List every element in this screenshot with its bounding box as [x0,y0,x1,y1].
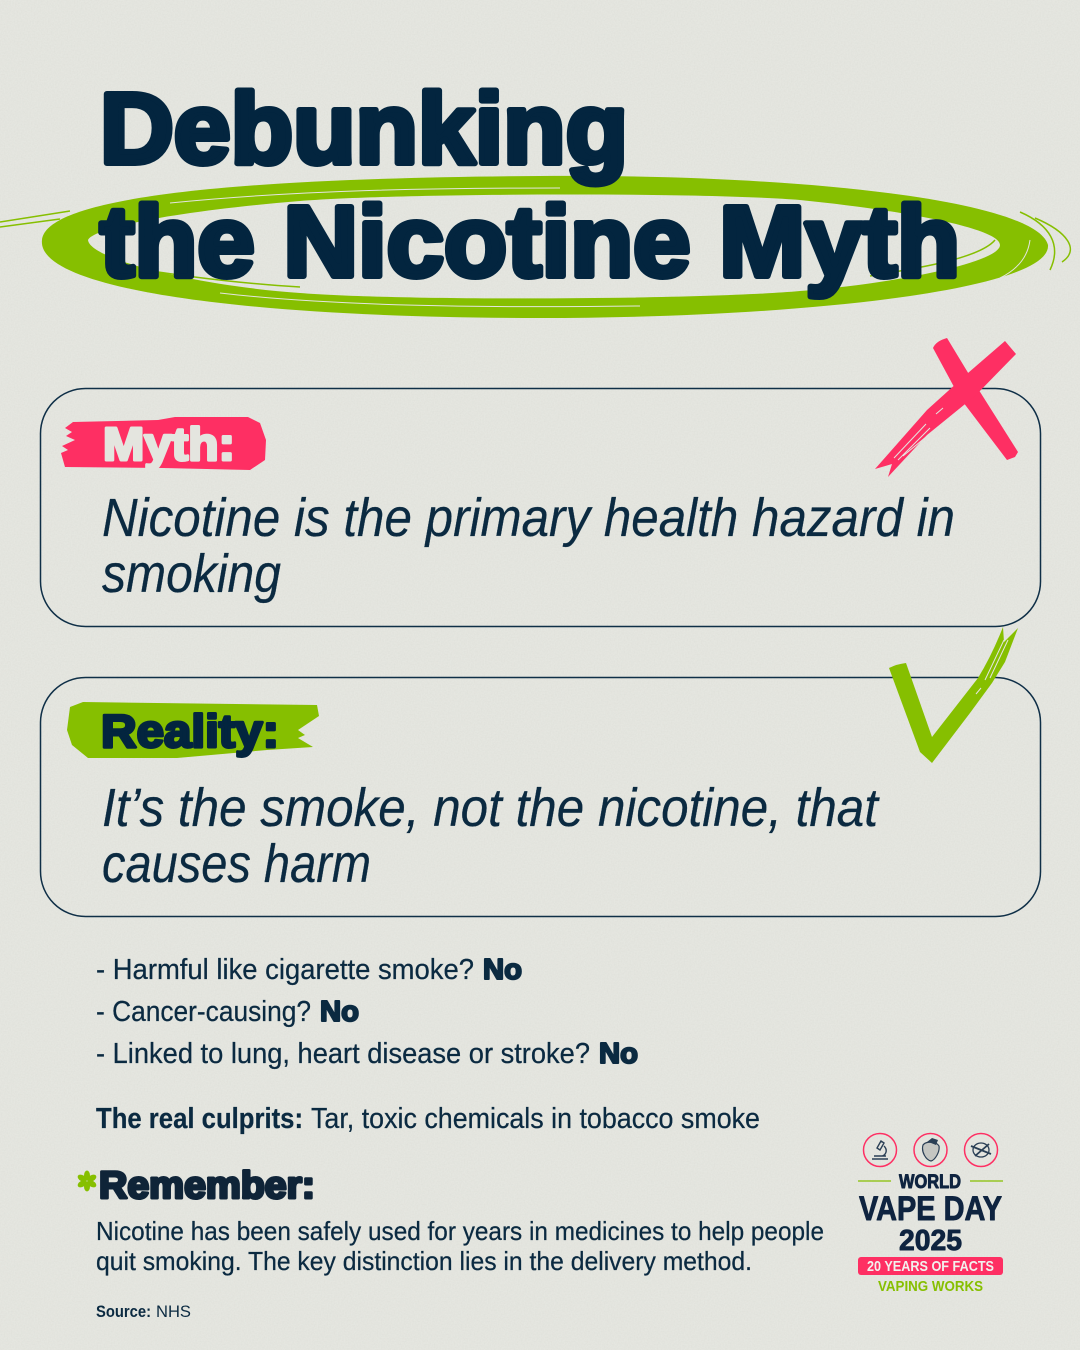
remember heading: Remember: [99,1165,315,1207]
icon: pink cross [875,338,1018,477]
list of questions: - Linked to lung, heart disease or stroke? [96,1038,590,1070]
green brush ellipse around title [0,176,1070,318]
list of questions [96,954,638,1070]
logo tagline: VAPING WORKS [878,1279,983,1295]
title: the Nicotine Myth [100,186,960,298]
icon: green asterisk [76,1170,98,1192]
myth statement: smoking [102,544,281,604]
logo wordmark: 2025 [899,1225,962,1257]
reality statement: causes harm [102,834,371,894]
source: Source: [96,1302,151,1321]
title: Debunking [100,73,628,185]
panel: reality [40,678,1040,916]
icon: no cigarette [964,1134,998,1166]
list of questions: No [483,954,522,986]
list of questions: No [320,996,359,1028]
list of questions: - Harmful like cigarette smoke? [96,954,474,986]
logo: World Vape Day 2025 [858,1134,1003,1295]
logo banner: 20 YEARS OF FACTS [867,1258,994,1275]
icon: green check [889,627,1018,763]
title [100,73,960,298]
source [96,1302,191,1321]
list of questions: No [599,1038,638,1070]
logo wordmark [859,1172,1002,1257]
logo wordmark: WORLD [899,1172,961,1193]
source: NHS [156,1302,191,1321]
remember paragraph: quit smoking. The key distinction lies in the delivery method. [96,1246,752,1276]
myth statement: Nicotine is the primary health hazard in [102,488,955,548]
panel: myth [40,388,1040,626]
list of questions: - Cancer-causing? [96,996,311,1028]
icon: strawberry [914,1134,947,1166]
myth label: Myth: [103,418,235,470]
logo wordmark: VAPE DAY [859,1190,1002,1228]
icon: microscope [864,1134,896,1166]
real culprits line: Tar, toxic chemicals in tobacco smoke [311,1103,760,1135]
reality statement: It’s the smoke, not the nicotine, that [102,778,880,838]
reality statement [102,778,880,894]
reality label: Reality: [101,705,279,757]
reality label [67,702,319,758]
myth statement [102,488,955,604]
real culprits line: The real culprits: [96,1103,303,1135]
real culprits line [96,1103,760,1135]
remember paragraph [96,1216,824,1276]
myth label [61,417,266,470]
remember paragraph: Nicotine has been safely used for years in medicines to help people [96,1216,824,1246]
